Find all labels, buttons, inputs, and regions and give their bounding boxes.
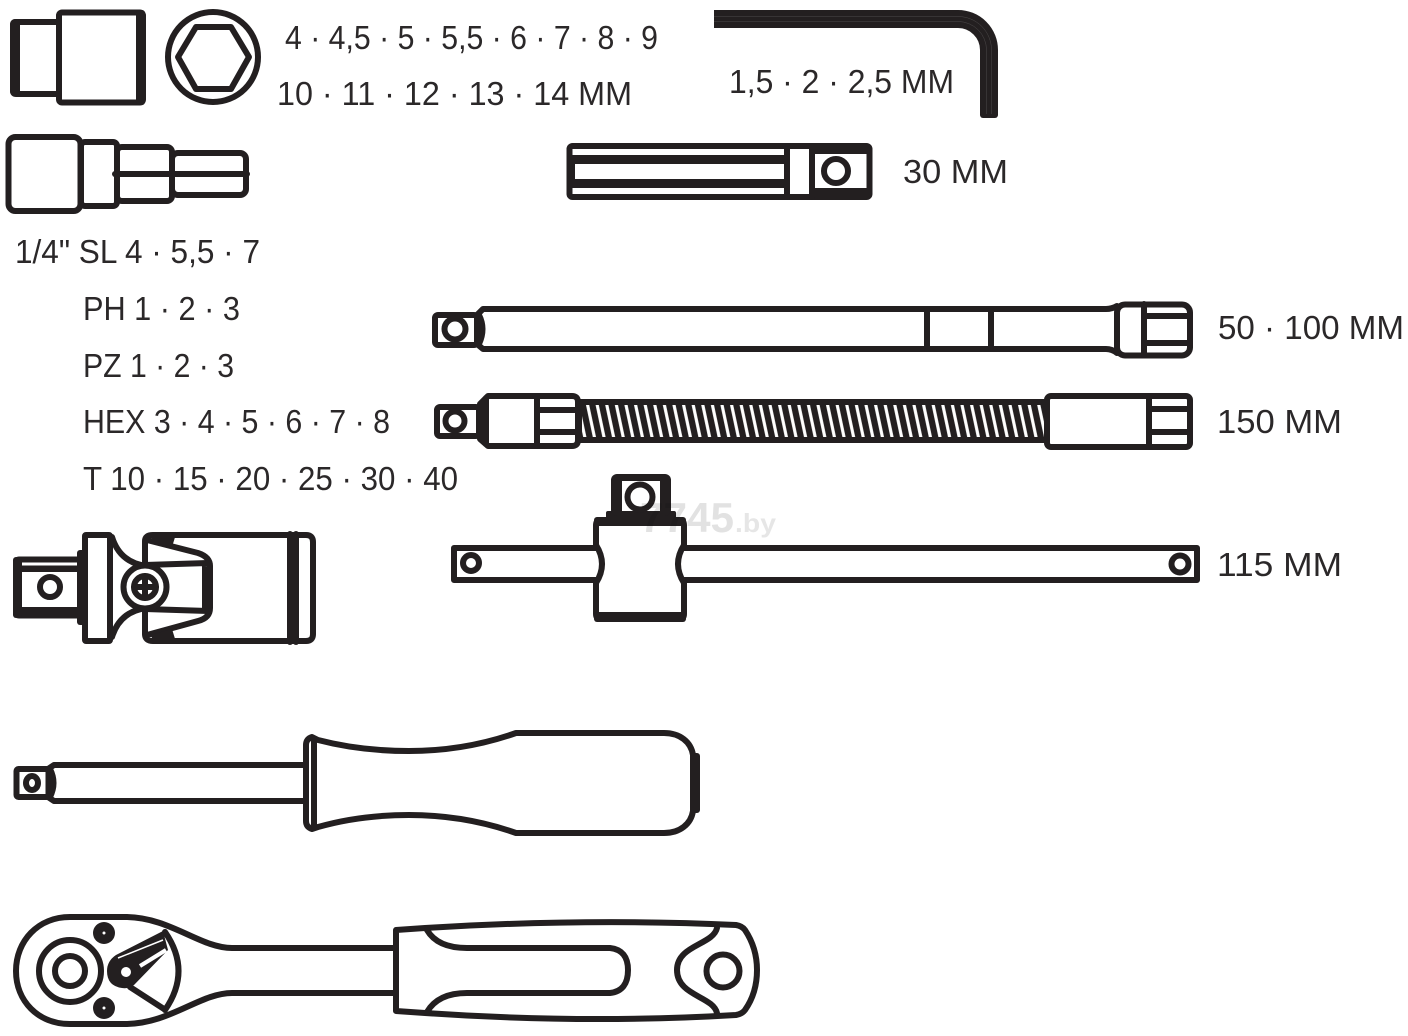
label: bit sizes: HEX 3 · 4 · 5 · 6 · 7 · 8 <box>83 403 390 440</box>
icon: hex key <box>714 16 998 118</box>
label: socket sizes: 4 · 4,5 · 5 · 5,5 · 6 · 7 · 8 · 9 <box>285 19 658 56</box>
watermark: 7745 <box>640 494 734 541</box>
label: bit holder length: 30 MM <box>903 153 1008 190</box>
icon: bit holder <box>569 146 870 197</box>
label: bit sizes: PZ 1 · 2 · 3 <box>83 347 234 384</box>
icon: extension bar <box>435 304 1190 356</box>
label: bit sizes: T 10 · 15 · 20 · 25 · 30 · 40 <box>83 460 458 497</box>
label: T-bar length: 115 MM <box>1217 546 1342 583</box>
icon: socket end view <box>168 12 258 102</box>
label: flexible extension length: 150 MM <box>1217 403 1342 440</box>
label: bit sizes: PH 1 · 2 · 3 <box>83 290 240 327</box>
label: hex key sizes: 1,5 · 2 · 2,5 MM <box>729 63 954 100</box>
watermark: .by <box>735 508 777 538</box>
label: bit sizes: 1/4" SL 4 · 5,5 · 7 <box>15 233 260 270</box>
icon: universal joint <box>13 534 313 642</box>
label: bit sizes <box>15 233 458 497</box>
icon: ratchet <box>16 917 757 1024</box>
label: socket sizes: 10 · 11 · 12 · 13 · 14 MM <box>277 75 632 112</box>
label: socket sizes <box>277 19 658 112</box>
icon: socket side view <box>10 10 145 105</box>
icon: sliding T-bar <box>454 474 1197 622</box>
watermark <box>640 494 777 541</box>
label: extension bar lengths: 50 · 100 MM <box>1218 309 1404 346</box>
icon: screwdriver handle <box>16 733 697 833</box>
icon: bit adapter <box>8 137 247 211</box>
icon: flexible extension <box>437 396 1190 447</box>
